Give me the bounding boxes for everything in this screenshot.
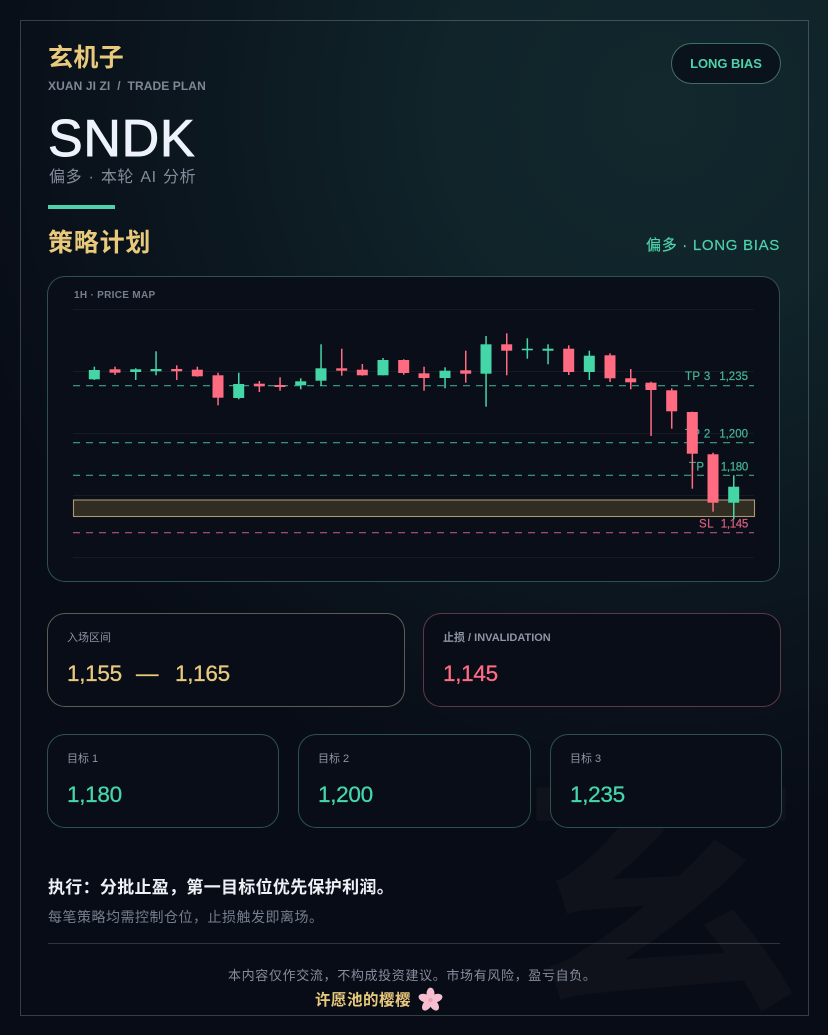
icon: cherry blossom <box>418 988 442 1011</box>
level labels: 1,235 <box>719 371 748 383</box>
level labels <box>685 371 748 530</box>
ticker: SNDK <box>48 110 195 168</box>
green candles <box>89 336 739 519</box>
target 3 label: 目标 3 <box>570 753 601 765</box>
level labels: TP 2 <box>685 428 711 440</box>
entry zone <box>74 500 754 516</box>
chart title: 1H · PRICE MAP <box>74 290 155 301</box>
brand subtitle: XUAN JI ZI / TRADE PLAN <box>48 79 206 93</box>
red candles <box>110 333 718 512</box>
ticker subtitle: 偏多 · 本轮 AI 分析 <box>49 169 196 186</box>
author name: 许愿池的樱樱 <box>315 992 411 1009</box>
level labels: 1,145 <box>721 518 748 530</box>
level labels: TP 1 <box>689 462 715 474</box>
divider <box>48 943 780 944</box>
entry dash: — <box>136 660 158 686</box>
entry high value: 1,165 <box>175 660 230 686</box>
level labels: TP 3 <box>685 371 711 383</box>
section heading: 策略计划 <box>48 229 151 257</box>
execution note: 执行：分批止盈，第一目标位优先保护利润。 <box>48 878 394 897</box>
bias badge: LONG BIAS <box>690 56 762 71</box>
target 1 value: 1,180 <box>67 782 122 806</box>
bias badge <box>671 43 781 84</box>
risk note: 每笔策略均需控制仓位，止损触发即离场。 <box>48 909 324 925</box>
target 1 label: 目标 1 <box>67 753 98 765</box>
panel: target 1 <box>47 734 279 828</box>
target 2 value: 1,200 <box>318 782 373 806</box>
level labels: 1,200 <box>719 428 748 440</box>
panel: target 2 <box>298 734 531 828</box>
level labels: SL <box>699 518 714 530</box>
panel: entry zone <box>47 613 405 707</box>
target 3 value: 1,235 <box>570 782 625 806</box>
stop label: 止损 / INVALIDATION <box>443 632 551 644</box>
brand name: 玄机子 <box>48 44 124 72</box>
entry low value: 1,155 <box>67 660 122 686</box>
panel: target 3 <box>550 734 782 828</box>
accent bar <box>48 204 115 208</box>
stop value: 1,145 <box>443 660 498 686</box>
panel: stop loss <box>423 613 781 707</box>
level labels: 1,180 <box>721 462 748 474</box>
bias label: 偏多 · LONG BIAS <box>646 237 780 254</box>
disclaimer: 本内容仅作交流，不构成投资建议。市场有风险，盈亏自负。 <box>228 968 597 983</box>
price level lines <box>73 386 754 533</box>
panel: price chart <box>47 276 780 582</box>
target 2 label: 目标 2 <box>318 753 349 765</box>
entry label: 入场区间 <box>67 632 111 644</box>
